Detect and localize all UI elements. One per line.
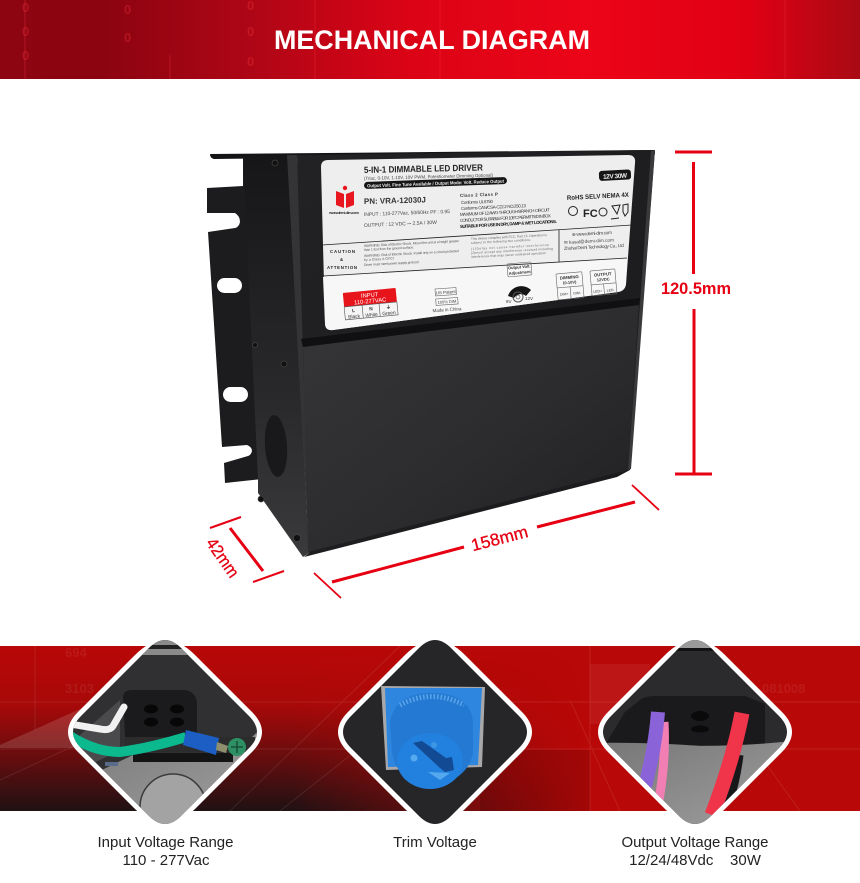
warning text: WARNING: Risk of Electric Shock. Install only on a circuit protected [364,249,459,258]
caption: input voltage: 110 - 277Vac [122,852,210,869]
input box [343,288,398,321]
header banner: 0 [124,2,131,17]
output volt adjustment: 12V [525,296,533,301]
logo: www.demi-dim.com [328,210,359,215]
certification marks: FC [583,208,598,220]
FCC text: (1)Delay not cause harmful interference [471,243,549,251]
feature pill: Output Volt. Fine Tune Available / Output Mode: Volt. Reduce Output [367,179,505,188]
wiring photo [73,640,257,824]
certifications: RoHS SELV NEMA 4X [567,192,630,202]
side face [243,155,309,557]
product name: 5-IN-1 DIMMABLE LED DRIVER [364,163,483,175]
label dividers [322,225,632,276]
patent badges [431,287,462,313]
lower feature band: 694 [65,645,87,660]
input box: Black [348,313,361,321]
caption: input voltage [98,834,234,869]
class and compliance text: Class 2 Class P [460,192,498,198]
input box: White [365,312,378,319]
output volt adjustment: 8V [506,299,512,304]
knob face [397,733,463,789]
wattage badge [599,169,631,181]
dimming box: DIM- [573,291,582,296]
product label [321,155,635,330]
feature: output wiring [598,640,792,824]
caution block: & [340,257,343,262]
contact details: ✉ kasal@demi-dim.com [564,237,614,245]
front cover [303,304,639,552]
warning text: WARNING: Risk of Electric Shock. Mount the unit at a height greater [364,239,460,248]
output wires photo [603,640,787,824]
side edge highlight [287,155,317,553]
contact details [564,230,624,251]
dimension: depth [202,517,284,582]
mounting flange [207,157,262,483]
input box: ⏚ [386,303,391,311]
dimension: length: 158mm [469,522,530,555]
warning text: Driver must meet power supply protocol [364,260,419,267]
output box: 12VDC [597,276,610,282]
lower feature band: 3103 [65,681,94,696]
product label: (Triac, 0-10V, 1-10V, 10V PWM, Potentiometer Dimming Optional) [364,173,493,181]
caution block [327,249,357,270]
FCC text: This device complies with FCC, Part 15. Operation is [471,233,547,241]
wattage badge: 12V 30W [603,173,628,181]
side screws [252,160,300,542]
caption: output voltage: 12/24/48Vdc 30W [629,852,762,869]
dimension: height [661,152,731,474]
output box [590,269,617,296]
logo [328,186,359,215]
input box: Green [382,310,396,317]
caption: output voltage: Output Voltage Range [622,834,768,851]
caution block: ATTENTION [327,265,357,270]
lower feature band [0,645,860,811]
white diamond frame [598,640,792,824]
cover top shadow [301,298,640,347]
caption: input voltage: Input Voltage Range [98,834,234,851]
knob cylinder [390,693,473,786]
class and compliance text [460,192,557,229]
input box: L [352,308,355,314]
FCC text: (2)must accept any interference received including [471,247,553,255]
header banner [0,0,860,79]
header banner: 0 [124,30,131,45]
class and compliance text: SUITABLE FOR USE IN DRY, DAMP & WET LOCATIONS. [460,219,557,229]
output volt adjustment: Output Volt. [508,263,531,270]
white diamond frame [338,640,532,824]
product label: OUTPUT : 12 VDC ⎓ 2.5A / 30W [364,220,437,229]
dimension: depth: 42mm [202,534,243,581]
header banner: 0 [22,24,29,39]
caution block: CAUTION [330,249,355,254]
title: MECHANICAL DIAGRAM [274,25,590,55]
dimming box: DIM+ [560,292,569,297]
output box: LED- [607,288,616,293]
FCC text [471,233,553,259]
warning text [364,239,460,267]
front face [297,150,655,557]
dimension: length [314,485,659,598]
output box: LED+ [593,289,602,294]
input box: N [369,306,374,313]
caption: trim voltage: Trim Voltage [393,834,477,851]
patent badges: 100% DIM [437,299,456,305]
input box: 110-277VAC [354,297,387,306]
dimension: height: 120.5mm [661,279,731,298]
white diamond frame [68,640,262,824]
class and compliance text: Conforms UL8750 [461,199,494,205]
warning text: than 1 foot from the ground surface. [364,245,414,252]
part number and ratings: PN: VRA-12030J [364,195,426,206]
class and compliance text: MAXIMUM OF 12 AWG THROUGH BRANCH CIRCUIT [460,207,550,217]
patent badges: US Patent [436,289,457,295]
right edge [628,150,655,470]
output volt adjustment: Adjustment [509,269,532,276]
class and compliance text: CONDUCTOR SUITABLE FOR 105°C PERMITTED IN BOX [460,213,551,223]
output volt adjustment [506,262,533,304]
cable knockout [263,414,289,478]
class and compliance text: Conforms CAN/CSA-C22.2 NO.250.13 [461,203,527,211]
top lip [210,150,655,159]
warning text: by a Class A GFCI [364,256,394,262]
input box: INPUT [361,292,379,300]
output box: OUTPUT [594,271,612,278]
header banner: 0 [22,0,29,15]
patent badges: Made in China [432,306,462,313]
label plate [321,155,635,330]
dimming box: DIMMING [560,274,580,281]
trim knob photo [343,640,527,824]
mounting slots [217,278,248,402]
dimming box [556,272,584,300]
product label: INPUT : 110-277Vac, 50/60Hz PF : 0.95 [364,209,450,218]
dimming box: (0-10V) [563,279,577,285]
feature: input wiring [68,640,262,824]
caption: output voltage [622,834,768,869]
header banner: 0 [22,48,29,63]
header banner: 0 [247,54,254,69]
LED driver product [207,150,655,557]
certification marks [568,204,628,220]
contact details: ⊕ www.demi-dim.com [572,230,612,237]
FCC text: interference that may cause undesired operation [471,251,546,259]
contact details: Zhuhai Demi Technology Co., Ltd [564,243,624,251]
feature: trim potentiometer [338,640,532,824]
lower label area [323,259,627,330]
FCC text: subject to the following two conditions: [471,238,531,245]
header banner: 0 [247,24,254,39]
lower feature band: 081008 [762,681,805,696]
